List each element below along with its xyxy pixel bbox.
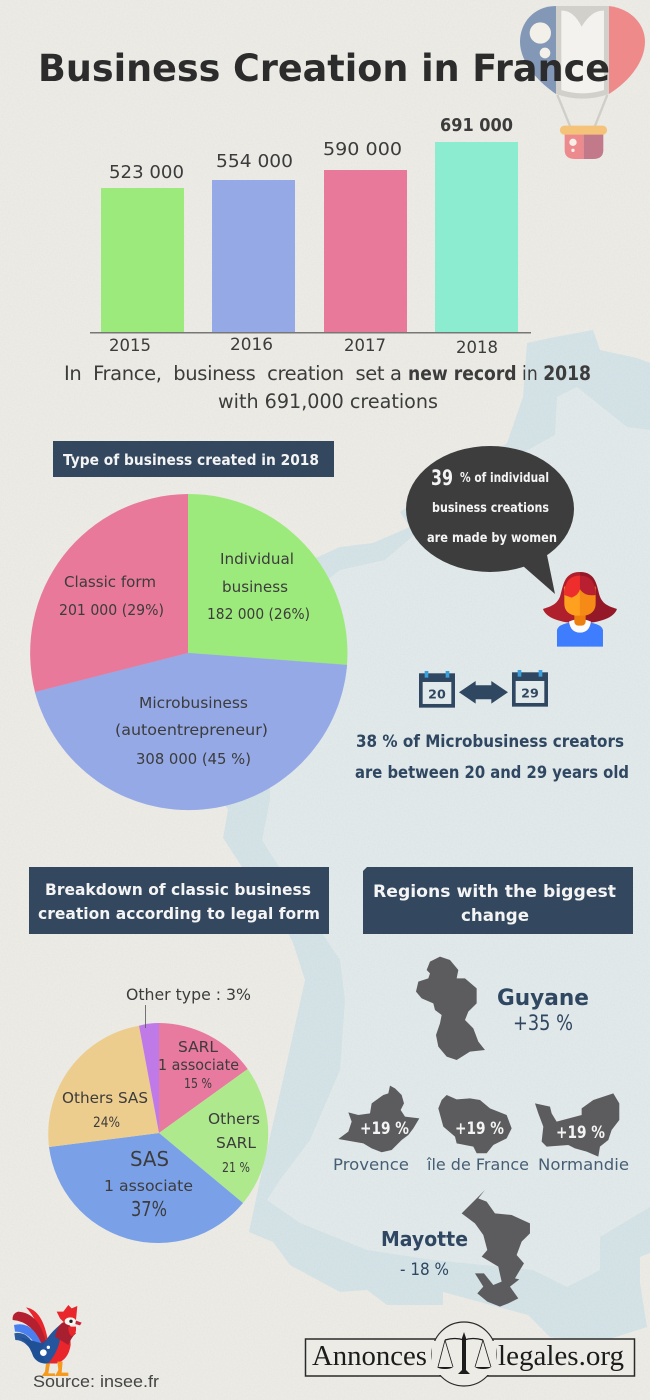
bar chart: business creations by year: 2015 xyxy=(109,336,151,356)
heading: type of business xyxy=(53,441,334,477)
pie chart: legal form: Other type : 3% xyxy=(126,985,251,1004)
callout: 39% of individual business creations: are made by women xyxy=(427,531,557,546)
heading: legal form breakdown xyxy=(29,867,329,934)
region: Ile de France: île de France xyxy=(426,1155,529,1174)
heading: regions xyxy=(363,867,633,934)
logo: Annonces legales.org: legales.org xyxy=(498,1341,624,1372)
text: microbusiness creators age: 38 % of Microbusiness creators xyxy=(356,732,624,752)
heading: type of business: Type of business created in 2018 xyxy=(63,451,319,469)
pie chart: legal form: 24% xyxy=(93,1115,120,1131)
callout: 39% of individual business creations: 39 xyxy=(431,466,453,490)
text: microbusiness creators age xyxy=(355,732,629,783)
pie chart: type of business xyxy=(30,494,347,810)
pie chart: legal form: 37% xyxy=(131,1197,167,1221)
region: Provence xyxy=(333,1086,419,1174)
pie chart: legal form: SAS xyxy=(130,1147,169,1171)
pie chart: type of business: 308 000 (45 %) xyxy=(136,750,251,768)
pie chart: legal form: SARL xyxy=(178,1038,219,1056)
heading: legal form breakdown: Breakdown of classic business xyxy=(45,880,311,899)
bar chart: business creations by year xyxy=(90,115,531,358)
region: Normandie xyxy=(535,1093,629,1174)
region: Provence: Provence xyxy=(333,1155,409,1174)
icon: calendars with double arrow: 20 xyxy=(428,686,446,701)
icon: calendars with double arrow: 29 xyxy=(521,685,539,700)
region: Ile de France: +19 % xyxy=(455,1119,504,1139)
text: new record summary: In France, business creation set a xyxy=(64,362,402,385)
pie chart: type of business: business xyxy=(222,578,288,596)
pie chart: legal form: Others xyxy=(208,1110,260,1128)
pie chart: type of business: Microbusiness xyxy=(139,694,248,712)
heading: regions: Regions with the biggest xyxy=(373,882,616,902)
callout: 39% of individual business creations: business creations xyxy=(432,501,549,516)
region: Guyane: Guyane xyxy=(497,986,589,1011)
region: Mayotte: - 18 % xyxy=(400,1260,449,1280)
pie chart: legal form: 21 % xyxy=(222,1161,250,1176)
heading: legal form breakdown: creation according to legal form xyxy=(38,904,320,923)
bar chart: business creations by year: 2018 xyxy=(456,338,498,358)
pie chart: type of business: Classic form xyxy=(64,573,156,591)
source: Source: insee.fr xyxy=(33,1372,159,1391)
region: Guyane: +35 % xyxy=(513,1011,573,1035)
heading: regions: change xyxy=(461,906,529,926)
pie chart: legal form xyxy=(48,985,268,1243)
region: Ile de France xyxy=(426,1095,529,1174)
icon: calendars with double arrow xyxy=(419,670,548,708)
logo: Annonces legales.org xyxy=(306,1322,634,1386)
region: Guyane xyxy=(416,957,589,1060)
text: new record summary xyxy=(64,362,591,413)
icon: woman xyxy=(543,572,617,647)
icon: rooster xyxy=(13,1305,82,1376)
bar chart: business creations by year: 691 000 xyxy=(440,115,513,136)
pie chart: type of business: Individual xyxy=(220,550,294,568)
text: new record summary: with 691,000 creations xyxy=(218,390,438,413)
pie chart: type of business: (autoentrepreneur) xyxy=(115,721,268,739)
pie chart: legal form: 1 associate xyxy=(104,1177,193,1195)
bar chart: business creations by year: 590 000 xyxy=(323,139,402,160)
pie chart: legal form: 15 % xyxy=(184,1077,212,1092)
bar chart: business creations by year: 2017 xyxy=(344,336,386,356)
icon: French flag hot-air balloon xyxy=(520,6,645,159)
pie chart: type of business: 201 000 (29%) xyxy=(59,601,164,619)
pie chart: legal form: Others SAS xyxy=(62,1089,148,1107)
callout: 39% of individual business creations xyxy=(406,446,574,594)
region: Provence: +19 % xyxy=(360,1119,409,1139)
region: Normandie: +19 % xyxy=(556,1123,605,1143)
bar chart: business creations by year: 523 000 xyxy=(109,162,184,183)
logo: Annonces legales.org: Annonces xyxy=(312,1341,427,1372)
callout: 39% of individual business creations: % of individual xyxy=(460,471,549,486)
region: Mayotte: Mayotte xyxy=(381,1227,468,1251)
text: new record summary: new record in 2018 xyxy=(408,362,591,385)
pie chart: legal form: SARL xyxy=(216,1134,257,1152)
pie chart: type of business: 182 000 (26%) xyxy=(207,605,310,623)
bar chart: business creations by year: 554 000 xyxy=(216,151,293,172)
bar chart: business creations by year: 2016 xyxy=(230,335,273,355)
region: Normandie: Normandie xyxy=(538,1155,629,1174)
title: Business Creation in France xyxy=(38,47,610,90)
region: Mayotte xyxy=(381,1190,530,1307)
pie chart: legal form: 1 associate xyxy=(158,1056,239,1074)
